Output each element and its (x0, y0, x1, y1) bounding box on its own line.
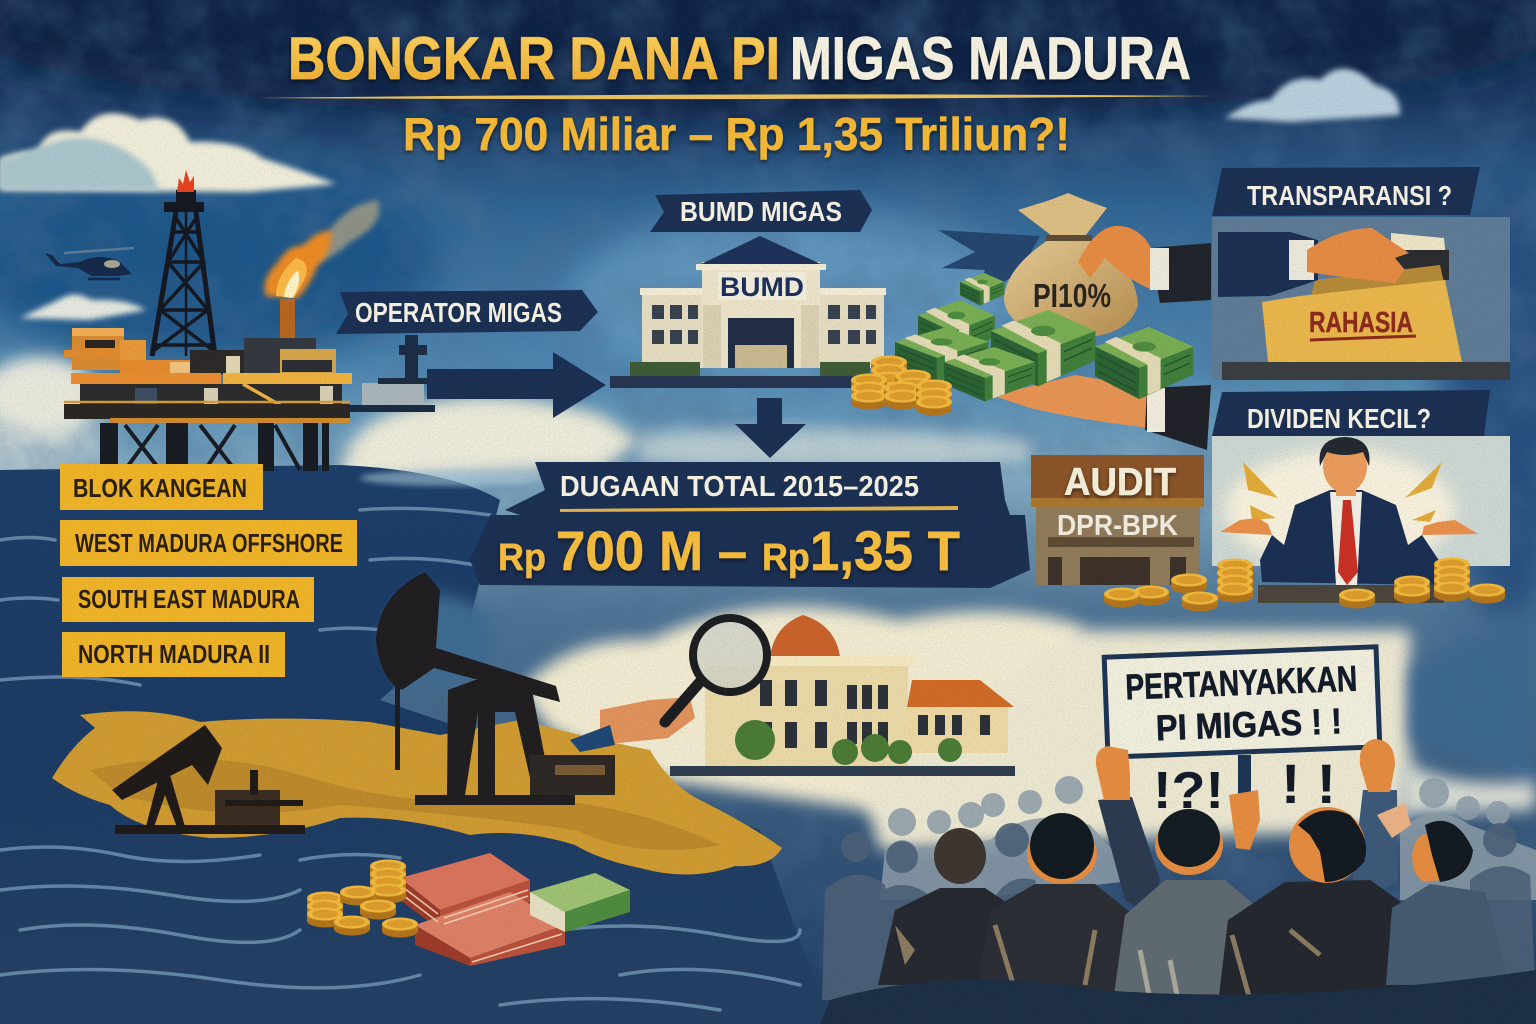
BUMD label (650, 190, 872, 232)
panel scene (1212, 436, 1510, 566)
coin piles (1104, 558, 1505, 612)
table (1258, 585, 1444, 603)
panel scene (1212, 217, 1510, 380)
BUMD building: BUMD (720, 272, 804, 302)
tag: blok kangean (60, 464, 263, 510)
BUMD building (610, 236, 886, 388)
derrick tower (152, 212, 215, 356)
panel heading: TRANSPARANSI ? (1247, 180, 1452, 211)
tag: north madura ii: NORTH MADURA II (78, 639, 270, 669)
operator label (336, 290, 598, 334)
title: BONGKAR DANA PI (288, 25, 780, 92)
mid deck (71, 373, 221, 384)
protester 5 (1386, 821, 1510, 985)
upper modules (72, 328, 124, 370)
tag: north madura ii (62, 632, 285, 677)
audit building (1031, 455, 1204, 585)
protest sign (1104, 647, 1380, 845)
subtitle: Rp 700 Miliar – Rp 1,35 Triliun?! (403, 108, 1070, 160)
oil rig (64, 170, 352, 471)
hand upper (1078, 226, 1152, 290)
BUMD label: BUMD MIGAS (680, 196, 842, 227)
sea and waves (0, 465, 830, 1024)
panel heading (1212, 167, 1480, 216)
arrow: BUMD to total (735, 398, 806, 458)
protest crowd (820, 647, 1536, 1024)
rig legs (100, 423, 329, 471)
background silhouettes (880, 776, 1536, 900)
small pumpjack and refinery (112, 725, 305, 834)
red banknotes (400, 853, 565, 966)
total amount: Rp 700 M – Rp1,35 T (498, 519, 960, 582)
tag: blok kangean: BLOK KANGEAN (73, 473, 247, 503)
tag: west madura offshore: WEST MADURA OFFSHORE (75, 528, 343, 558)
foreground haze (820, 970, 1536, 1024)
government building (670, 615, 1015, 776)
coins (307, 860, 418, 938)
money on the sea (307, 853, 630, 966)
protester 2 (975, 813, 1130, 1000)
hand with sleeve (1218, 228, 1409, 297)
secret folder: RAHASIA (1309, 307, 1413, 339)
green banknotes (530, 873, 630, 932)
man in suit (1220, 437, 1478, 585)
coin stacks (851, 356, 952, 416)
hand lower (991, 375, 1151, 428)
panel heading: DIVIDEN KECIL? (1247, 403, 1431, 434)
protest sign: ! ! (1281, 752, 1336, 815)
cash stacks (960, 273, 1004, 306)
magnifying glass with hand (570, 618, 767, 752)
flare stack and flame (264, 200, 379, 339)
protest sign: PI MIGAS ! ! (1155, 700, 1343, 748)
total estimate panel (470, 462, 1030, 588)
panel: dividen kecil (1104, 390, 1510, 612)
service vessel (350, 335, 440, 412)
tag: south east madura (62, 577, 314, 622)
lower deck (64, 404, 350, 419)
title rule (258, 94, 1214, 99)
operator label: OPERATOR MIGAS (355, 297, 562, 328)
arrow: operator to BUMD (427, 352, 606, 418)
dark wing (938, 230, 1040, 300)
tag: west madura offshore (60, 520, 357, 566)
raised arms and fists (1096, 739, 1411, 915)
protest sign: !?! (1153, 762, 1224, 820)
madura island map (52, 711, 782, 875)
bag (1004, 240, 1138, 338)
protester 1 (878, 828, 1018, 985)
panel: transparansi (1212, 167, 1510, 380)
protester 4 (1217, 807, 1432, 1012)
title (288, 25, 1191, 92)
protester 3 (1112, 809, 1272, 1010)
clouds (0, 69, 1536, 850)
title: MIGAS MADURA (790, 25, 1191, 92)
total heading (505, 462, 1010, 515)
money bag and cash (895, 193, 1211, 450)
tag: south east madura: SOUTH EAST MADURA (78, 584, 300, 614)
panel heading (1212, 390, 1490, 436)
secret folder (1262, 233, 1462, 362)
audit building: AUDIT (1064, 461, 1176, 504)
block name tags (60, 464, 357, 677)
total heading: DUGAAN TOTAL 2015–2025 (560, 471, 919, 503)
audit building: DPR-BPK (1057, 510, 1178, 542)
surprise marks (1243, 462, 1442, 522)
money bag and cash: PI10% (1033, 277, 1111, 314)
large pumpjack (376, 572, 615, 805)
helicopter icon (45, 248, 134, 279)
protest sign: PERTANYAKKAN (1125, 658, 1358, 707)
